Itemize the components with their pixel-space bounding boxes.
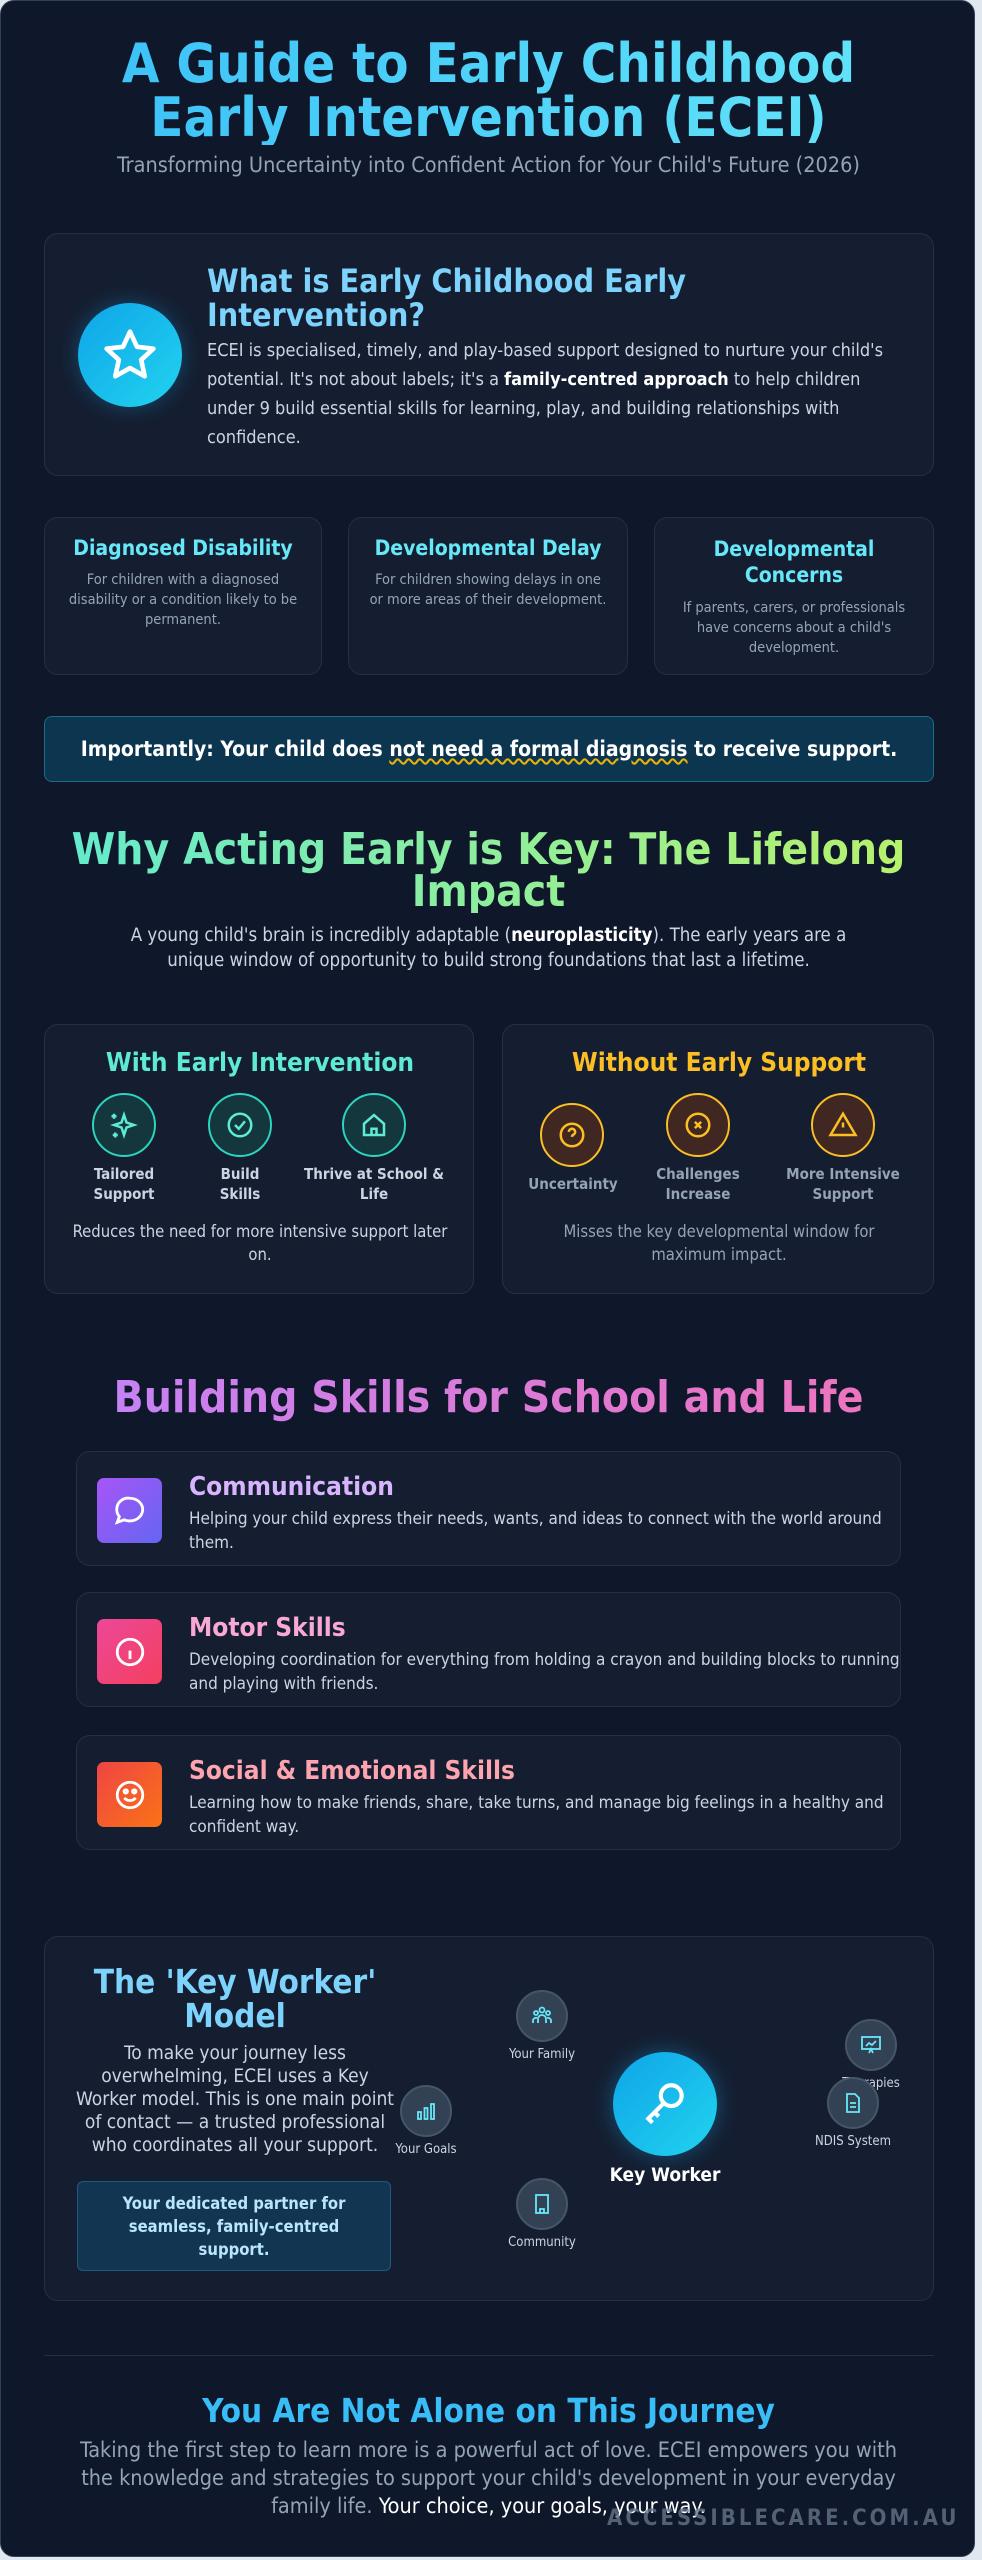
heading: building skills: Building Skills for School and Life: [114, 1372, 863, 1423]
node: your family: Your Family: [509, 2047, 575, 2062]
panel: key worker model: [44, 1936, 934, 2301]
panel: social emotional: Social & Emotional Skills: [189, 1756, 515, 1786]
panel: diagnosed disability: [44, 517, 322, 675]
subtitle: Transforming Uncertainty into Confident Action for Your Child's Future (2026): [117, 153, 860, 178]
closing text: Taking the first step to learn more is a powerful act of love. ECEI empowers you with the knowledge and strategies to support your child's development in your everyday family life. Your choice, your goals, your way.: [80, 2438, 897, 2519]
node: NDIS system: [815, 2077, 891, 2149]
title: Early Intervention (ECEI): [150, 86, 827, 149]
heading: What is Early Childhood Early: [207, 262, 686, 300]
labels: Tailored: [94, 1165, 154, 1183]
panel: developmental concerns: [654, 517, 934, 675]
title: [1, 37, 976, 145]
labels: [93, 1165, 155, 1203]
heading: The 'Key Worker': [94, 1962, 376, 2001]
panel: developmental concerns: Developmental: [714, 537, 874, 561]
node: key worker: [602, 2041, 728, 2186]
panel: without early support: [502, 1024, 934, 1294]
panel: what is ECEI: [44, 233, 934, 476]
panel: social emotional: Learning how to make friends, share, take turns, and manage big feelings in a healthy and confident way.: [189, 1793, 884, 1837]
panel: with early intervention: Skills: [220, 1185, 260, 1203]
node: therapies: [842, 2019, 900, 2091]
icon: tailored support: [92, 1093, 156, 1157]
panel: with early intervention: [44, 1024, 474, 1294]
callout: no diagnosis needed: Importantly: Your child does not need a formal diagnosis to receive support.: [81, 737, 897, 761]
panel: without early support: Support: [812, 1185, 874, 1203]
heading: Intervention?: [207, 296, 425, 334]
text: neuroplasticity: A young child's brain is incredibly adaptable (neuroplasticity). The early years are a unique window of opportunity to build strong foundations that last a lifetime.: [131, 925, 846, 971]
watermark: ACCESSIBLECARE.COM.AU: [607, 2506, 959, 2531]
icon: more intensive: [811, 1093, 875, 1157]
heading: why acting early: Why Acting Early is Key: The Lifelong: [72, 824, 905, 875]
heading: why acting early: [1, 829, 976, 913]
panel: with early intervention: Build: [221, 1165, 259, 1183]
icon: uncertainty: [540, 1103, 604, 1167]
node: key worker: Key Worker: [610, 2164, 720, 2186]
icon: challenges: [666, 1093, 730, 1157]
icon: smile: [97, 1762, 162, 1827]
text: To make your journey less overwhelming, ECEI uses a Key Worker model. This is one main point of contact — a trusted professional who coordinates all your support.: [76, 2042, 394, 2156]
icon: thrive: [342, 1093, 406, 1157]
callout: no diagnosis needed: [44, 716, 934, 782]
node: your family: [509, 1990, 575, 2062]
node: your goals: [395, 2085, 457, 2157]
panel: motor skills: Developing coordination for everything from holding a crayon and building blocks to running and playing with friends.: [189, 1650, 900, 1694]
panel: without early support: More Intensive: [786, 1165, 900, 1183]
panel: communication: Communication: [189, 1472, 394, 1502]
heading: not alone: You Are Not Alone on This Journey: [202, 2391, 775, 2430]
node: NDIS system: NDIS System: [815, 2134, 891, 2149]
icon: chat: [97, 1478, 162, 1543]
callout box: [77, 2181, 391, 2271]
panel: without early support: Uncertainty: [528, 1175, 618, 1193]
panel: developmental delay: [348, 517, 628, 675]
panel: motor skills: [76, 1592, 901, 1707]
heading: [207, 262, 686, 334]
icon: info: [97, 1619, 162, 1684]
text: Reduces the need for more intensive support later on.: [73, 1222, 447, 1264]
panel: diagnosed disability: For children with a diagnosed disability or a condition likely to be permanent.: [69, 572, 297, 628]
panel: communication: Helping your child express their needs, wants, and ideas to connect with the world around them.: [189, 1509, 882, 1553]
panel: motor skills: Motor Skills: [189, 1613, 346, 1643]
panel: with early intervention: Thrive at School &: [304, 1165, 444, 1183]
panel: with early intervention: Life: [360, 1185, 388, 1203]
callout box: support.: [199, 2240, 269, 2259]
icon: star: [78, 303, 182, 407]
node: your goals: Your Goals: [395, 2142, 457, 2157]
panel: developmental concerns: Concerns: [745, 563, 843, 587]
heading: Model: [184, 1996, 286, 2035]
callout box: seamless, family-centred: [129, 2217, 339, 2236]
callout box: Your dedicated partner for: [123, 2194, 345, 2213]
panel: developmental delay: For children showing delays in one or more areas of their development.: [370, 572, 606, 608]
panel: social emotional: [76, 1735, 901, 1850]
panel: without early support: Challenges: [656, 1165, 740, 1183]
heading: With Early Intervention: [106, 1048, 414, 1078]
heading: [94, 1962, 376, 2035]
panel: without early support: Without Early Support: [572, 1048, 866, 1078]
panel: developmental delay: Developmental Delay: [375, 536, 601, 560]
node: community: [508, 2178, 576, 2250]
node: therapies: Therapies: [842, 2076, 900, 2091]
body text: ECEI is specialised, timely, and play-based support designed to nurture your child's potential. It's not about labels; it's a family-centred approach to help children under 9 build essential skills for learning, play, and building relationships with confidence.: [207, 340, 883, 448]
node: community: Community: [508, 2235, 576, 2250]
title: A Guide to Early Childhood: [122, 32, 855, 95]
panel: developmental concerns: If parents, carers, or professionals have concerns about a child's development.: [683, 600, 905, 656]
panel: diagnosed disability: Diagnosed Disability: [73, 536, 293, 560]
panel: without early support: Misses the key developmental window for maximum impact.: [563, 1222, 874, 1264]
icon: build skills: [208, 1093, 272, 1157]
labels: Support: [93, 1185, 155, 1203]
heading: why acting early: Impact: [412, 866, 565, 917]
panel: without early support: Increase: [666, 1185, 730, 1203]
panel: communication: [76, 1451, 901, 1566]
